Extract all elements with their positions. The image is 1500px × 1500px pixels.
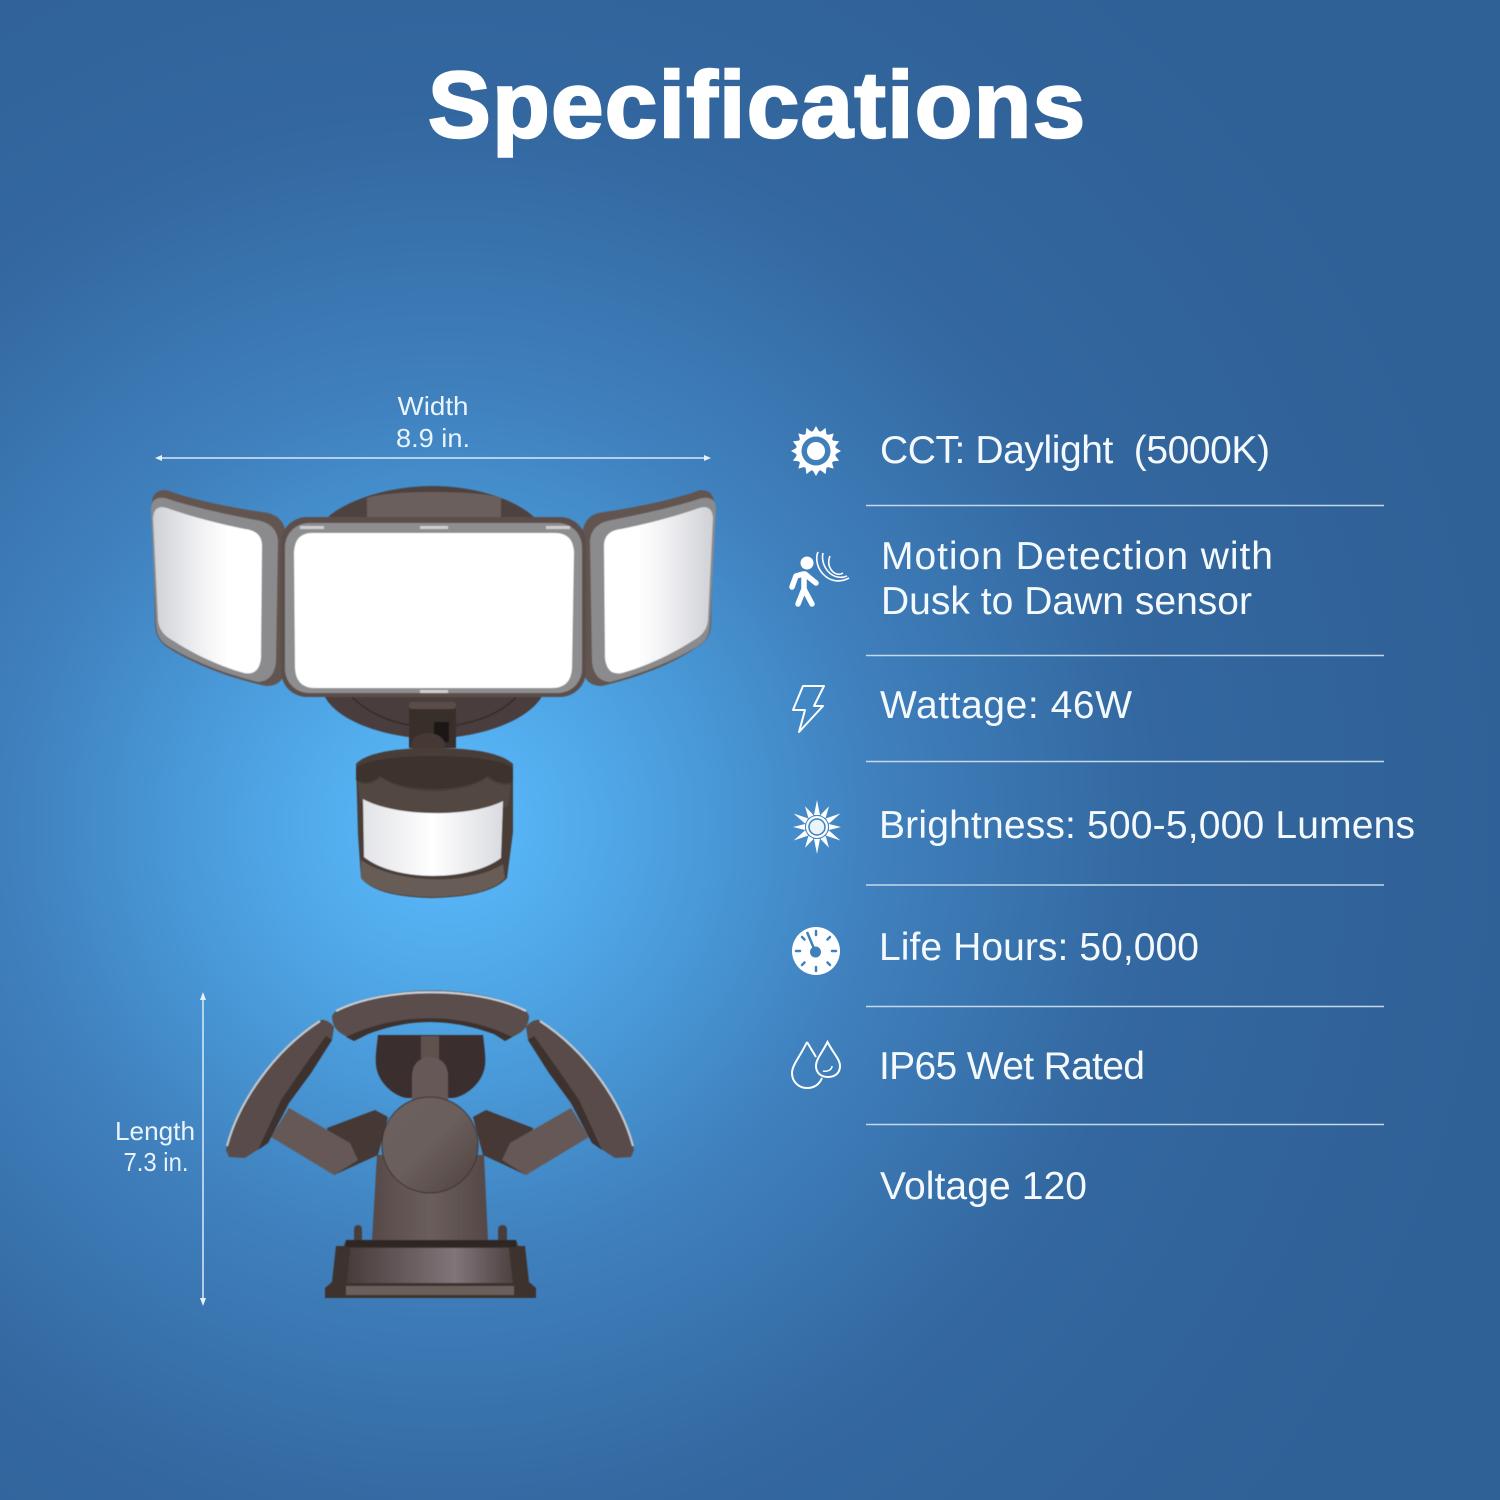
rear dome [329,486,537,530]
icon: lightning bolt [793,686,824,732]
head arcs [226,990,634,1158]
neck [409,702,456,757]
spec list [791,426,1415,1208]
right head [582,490,716,686]
spec: motion line one: Motion Detection with [881,535,1273,578]
title: Specifications [428,52,1085,157]
side view of flood light [226,990,634,1298]
spec: voltage: Voltage 120 [880,1165,1087,1208]
width arrow [155,455,711,461]
spec: life hours: Life Hours: 50,000 [879,926,1199,969]
spec: wattage: Wattage: 46W [880,684,1132,727]
screws [354,1225,507,1242]
icon: water drops [792,1042,840,1088]
length value: 7.3 in. [124,1147,188,1177]
base [325,1240,536,1298]
icon: motion detection [792,552,849,604]
spec: IP65: IP65 Wet Rated [879,1045,1145,1088]
icon: clock gauge [792,927,840,975]
motion sensor [356,748,513,898]
length dimension [115,992,206,1306]
center head [281,517,586,697]
mount back [376,1035,485,1098]
spec: motion line two: Dusk to Dawn sensor [881,580,1252,623]
spec: CCT: CCT: Daylight (5000K) [880,429,1270,472]
length arrow [200,992,206,1306]
icon: brightness sun [792,800,842,854]
arms [271,1108,589,1175]
pedestal [372,1155,488,1240]
width value: 8.9 in. [396,423,470,453]
front view of flood light [151,486,716,898]
ball joint [382,1097,478,1193]
icon: sun CCT [791,426,841,476]
left head [151,490,286,686]
lower backplate [323,692,544,739]
top cap [367,492,501,518]
width dimension [155,391,711,461]
length label: Length [115,1116,195,1146]
spec: brightness: Brightness: 500-5,000 Lumens [879,804,1415,847]
width label: Width [398,391,468,421]
upright [412,1057,448,1105]
